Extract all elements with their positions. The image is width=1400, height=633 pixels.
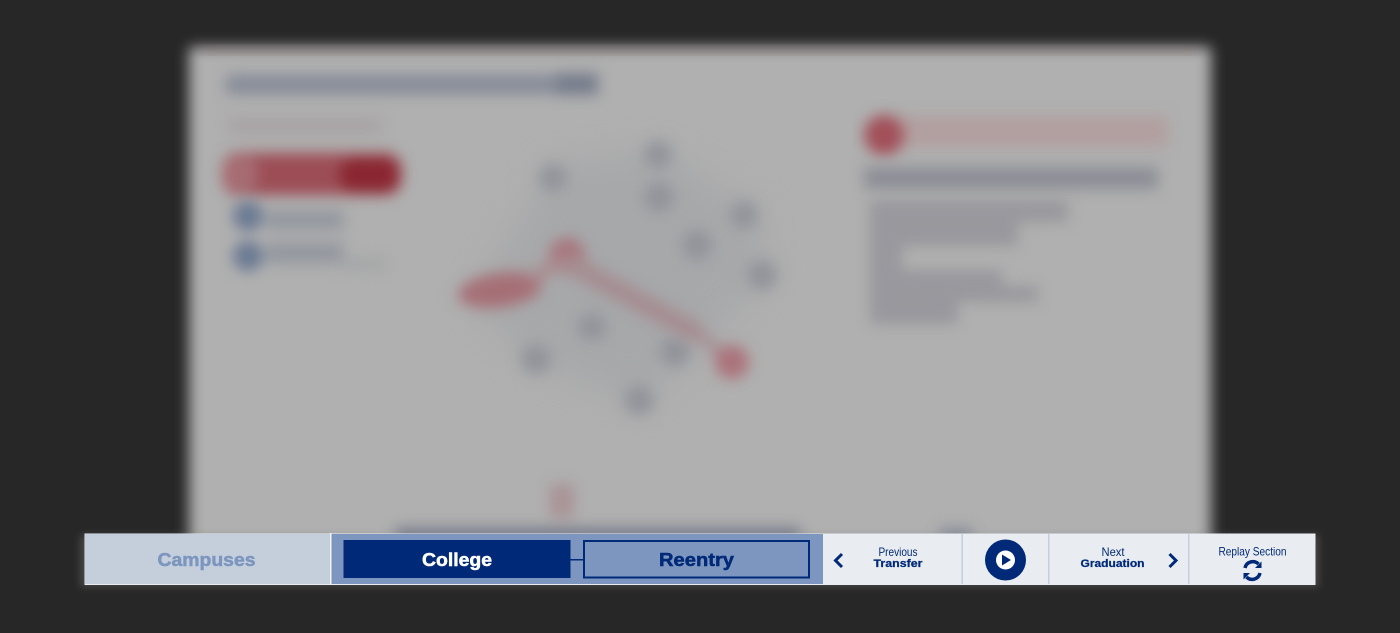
red heading band — [896, 116, 1168, 147]
button: Reentry — [584, 541, 809, 578]
previous destination: Transfer — [874, 558, 923, 570]
bar base — [84, 534, 1316, 585]
slide panel — [189, 47, 1211, 567]
blurred red selected button — [222, 153, 402, 195]
Reentry label: Reentry — [659, 550, 734, 570]
blurred network diagram — [456, 141, 777, 415]
navigation bar glow — [80, 535, 1319, 587]
blurred info panel — [864, 115, 1168, 324]
icon: replay arrows — [1244, 562, 1262, 580]
blurred slide title — [226, 73, 598, 95]
blurred background slide — [189, 47, 1211, 567]
control: replay section — [1218, 544, 1286, 580]
navigation bar — [84, 533, 1316, 585]
red number badge — [864, 115, 904, 155]
Campuses divider — [330, 533, 332, 585]
network nodes — [521, 141, 777, 415]
connector line — [570, 559, 583, 560]
button: College — [344, 540, 570, 578]
highlighted red route — [456, 238, 749, 379]
blurred bottom chart marks — [395, 484, 972, 542]
icon: left chevron — [836, 554, 842, 567]
Campuses background — [85, 534, 330, 584]
next destination: Graduation — [1080, 558, 1145, 570]
control: next — [1080, 545, 1176, 570]
next label: Next — [1102, 545, 1125, 559]
College background — [344, 540, 570, 578]
section background — [332, 534, 823, 584]
replay label: Replay Section — [1218, 544, 1286, 558]
icon: right chevron — [1170, 554, 1176, 567]
College label: College — [422, 550, 492, 570]
Reentry outline — [584, 541, 809, 578]
faint network area — [470, 150, 765, 405]
Campuses label: Campuses — [158, 550, 256, 570]
blurred section label — [228, 118, 382, 134]
info body text — [870, 200, 1068, 324]
section group: College and Reentry — [332, 534, 823, 584]
tab: Campuses — [85, 534, 330, 584]
control: previous — [836, 545, 923, 570]
blurred list items — [233, 201, 386, 271]
blurred top edge tint — [200, 48, 1200, 52]
previous label: Previous — [878, 545, 918, 559]
decorative dividers — [962, 534, 1190, 584]
icon: play button — [985, 540, 1026, 580]
info heading — [864, 167, 1158, 189]
